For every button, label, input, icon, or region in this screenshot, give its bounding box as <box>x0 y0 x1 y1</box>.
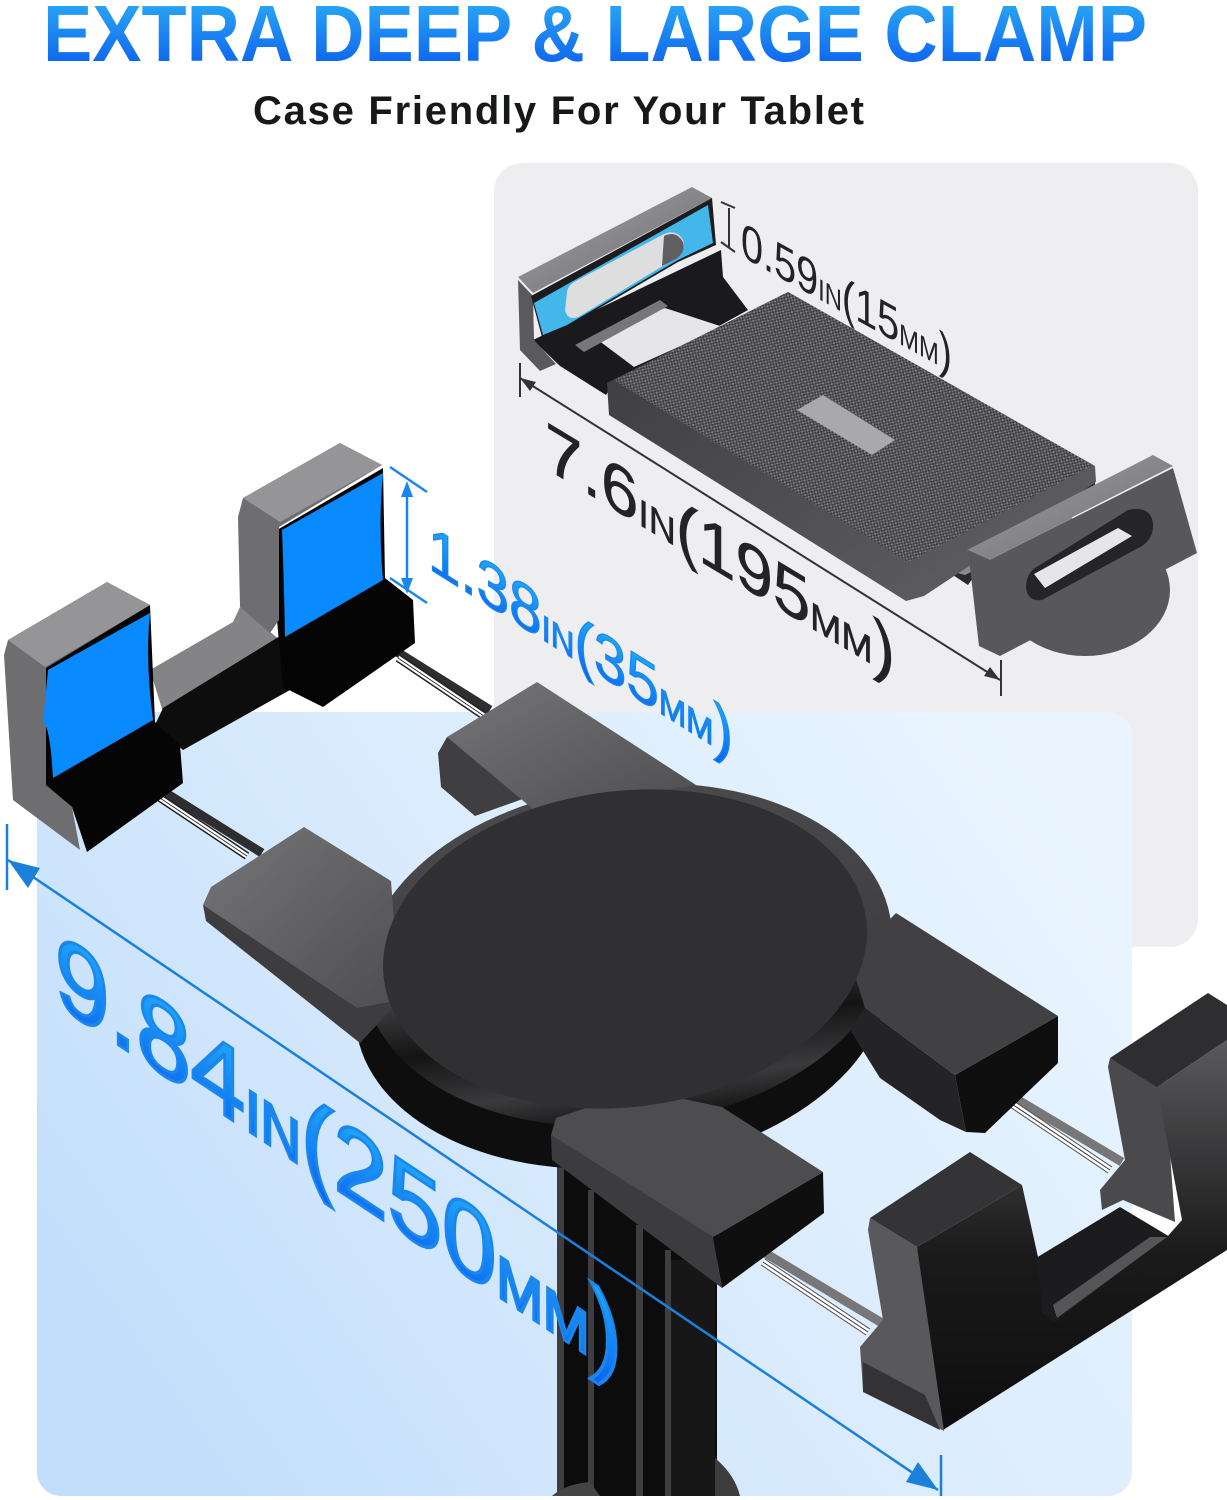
near jaw <box>860 1218 944 1431</box>
rods <box>145 637 1122 1332</box>
clamp: upper left <box>4 443 415 852</box>
mesh plate <box>607 292 1096 601</box>
stem <box>552 1150 740 1496</box>
dimension: 9.84in (250mm): 9.84IN(250MM) <box>55 908 622 1401</box>
dimension: 1.38in (35mm): 1.38IN(35MM) <box>428 510 733 772</box>
panel: blue background <box>37 712 1132 1496</box>
left jaw <box>45 605 183 852</box>
base ring <box>335 792 909 1198</box>
rails right <box>924 470 1095 585</box>
disc <box>365 763 885 1135</box>
clamp: lower right <box>860 993 1227 1431</box>
arm: right <box>850 913 1058 1133</box>
rails left <box>533 250 748 395</box>
dimension: 7.6in (195mm): 7.6IN(195MM) <box>545 406 895 693</box>
right jaw <box>967 455 1197 656</box>
back disc <box>1000 524 1170 656</box>
dimension: 9.84in (250mm) <box>7 824 941 1496</box>
arm: left <box>203 827 400 1043</box>
subtitle: Case Friendly For Your Tablet <box>253 89 864 133</box>
dimension: 7.6in (195mm) <box>520 363 1001 696</box>
arm: top <box>438 682 696 816</box>
right jaw <box>277 468 415 707</box>
channel and body <box>1036 1207 1175 1325</box>
connector bar <box>150 607 280 712</box>
small clamp product image <box>518 187 1197 656</box>
arm: bottom <box>551 1090 824 1288</box>
large clamp product image <box>4 443 1227 1496</box>
left jaw <box>518 187 716 371</box>
far jaw <box>1100 1058 1175 1222</box>
panel: grey background <box>494 163 1198 947</box>
dimension: 0.59in (15mm): 0.59IN(15MM) <box>741 211 952 384</box>
